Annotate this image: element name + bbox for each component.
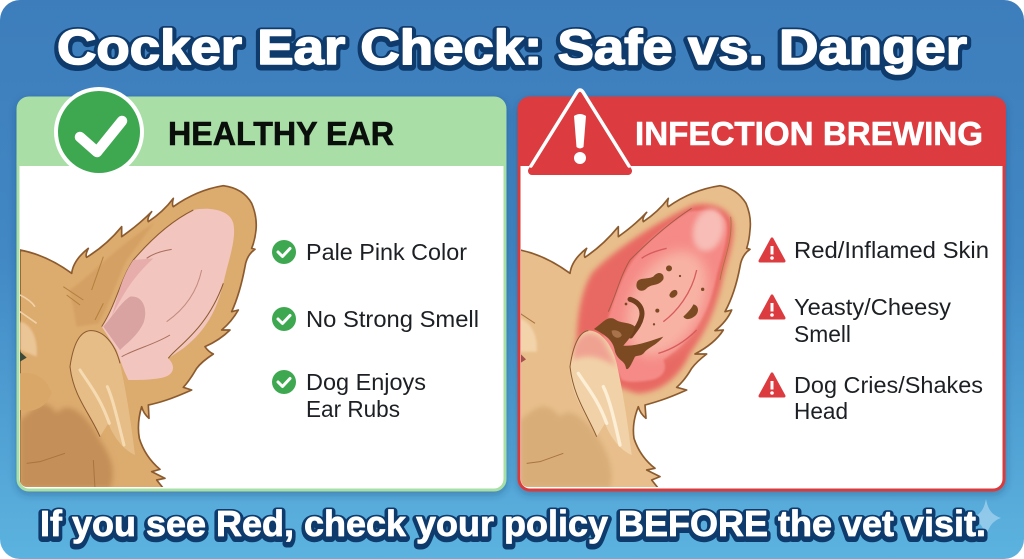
heading: healthy ear: HEALTHY EAR bbox=[168, 115, 394, 152]
list: infection signs bbox=[760, 237, 989, 424]
item: red skin: Red/Inflamed Skin bbox=[794, 237, 989, 263]
panel background infection bbox=[519, 98, 1004, 490]
item: no smell: No Strong Smell bbox=[306, 306, 479, 332]
title: Cocker Ear Check: Safe vs. Danger bbox=[57, 23, 967, 77]
item: ear rubs: Dog Enjoys bbox=[306, 369, 426, 395]
item: smell: Smell bbox=[794, 321, 851, 347]
header band infection bbox=[518, 97, 1006, 166]
item: shakes head bbox=[760, 372, 983, 424]
illustration: healthy dog ear bbox=[20, 186, 256, 488]
item: shakes head: Head bbox=[794, 398, 848, 424]
footer message: If you see Red, check your policy BEFORE the vet visit. bbox=[40, 505, 986, 546]
panel: infection bbox=[518, 90, 1006, 490]
panel background healthy bbox=[18, 98, 505, 490]
icon: green check badge bbox=[54, 87, 144, 177]
header band healthy bbox=[17, 97, 506, 166]
item: ear rubs: Ear Rubs bbox=[306, 396, 400, 422]
ear wax deposits bbox=[594, 265, 704, 369]
heading: infection brewing: INFECTION BREWING bbox=[635, 115, 983, 152]
item: smell bbox=[760, 294, 952, 347]
icon: sparkle bbox=[971, 499, 1001, 538]
item: ear rubs bbox=[272, 369, 426, 422]
panel: healthy ear bbox=[17, 87, 506, 490]
illustration: infected dog ear bbox=[520, 186, 750, 488]
item: pale pink: Pale Pink Color bbox=[306, 239, 467, 265]
title: Cocker Ear Check: Safe vs. Danger bbox=[57, 21, 967, 75]
item: shakes head: Dog Cries/Shakes bbox=[794, 372, 983, 398]
footer message: If you see Red, check your policy BEFORE the vet visit. bbox=[40, 503, 986, 544]
inflamed skin bbox=[577, 204, 733, 393]
item: smell: Yeasty/Cheesy bbox=[794, 294, 952, 320]
icon: warning triangle bbox=[531, 90, 629, 171]
list: healthy signs bbox=[272, 239, 479, 422]
